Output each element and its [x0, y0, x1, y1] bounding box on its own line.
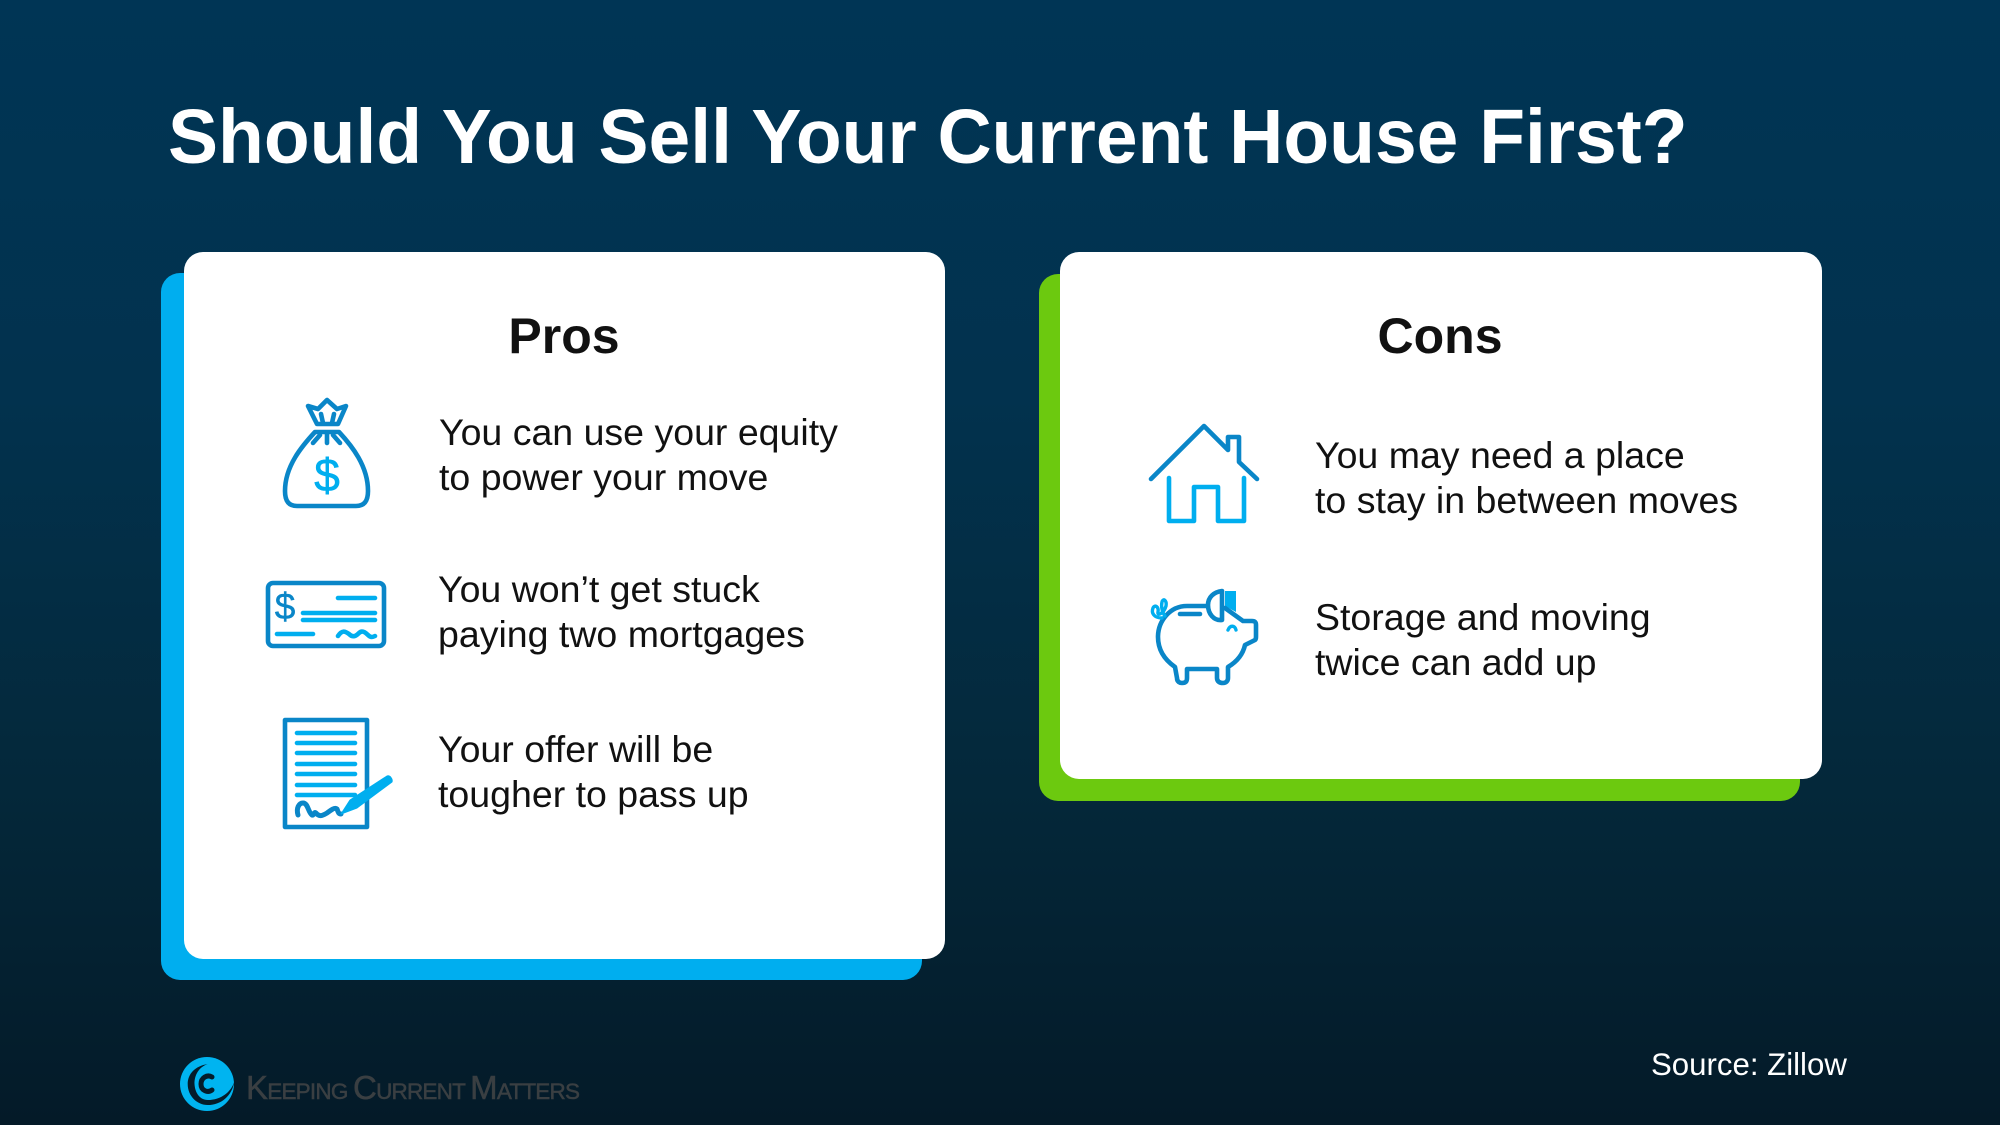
source note: Source: Zillow — [1651, 1047, 1847, 1082]
cons white card — [1060, 252, 1822, 779]
cons text: storage: Storage and moving — [1315, 596, 1651, 638]
cons text: storage: twice can add up — [1315, 641, 1596, 683]
icon: bank check — [266, 580, 386, 648]
cons green backing — [1039, 274, 1800, 801]
icon: signed contract — [282, 718, 393, 830]
cons text: place to stay: to stay in between moves — [1315, 479, 1738, 521]
cons heading: Cons — [1378, 308, 1502, 364]
pros text: equity — [439, 411, 838, 498]
logo swirl — [180, 1057, 234, 1111]
pros text: equity: to power your move — [439, 456, 768, 498]
icon: money bag: $ — [314, 449, 340, 501]
pros blue backing — [161, 273, 922, 980]
pros white card — [184, 252, 945, 959]
pros text: mortgages: paying two mortgages — [438, 613, 805, 655]
logo wordmark: KEEPING CURRENT MATTERS — [246, 1069, 580, 1105]
pros text: offer: Your offer will be — [438, 728, 713, 770]
cons text: place to stay — [1315, 434, 1738, 521]
panel: cons — [1039, 252, 1822, 801]
pros heading: Pros — [508, 308, 620, 364]
icon: piggy bank — [1150, 588, 1258, 686]
pros text: equity: You can use your equity — [439, 411, 838, 453]
logo: Keeping Current Matters — [180, 1057, 580, 1111]
panel: pros — [161, 252, 945, 980]
pros text: offer — [438, 728, 749, 815]
cons text: place to stay: You may need a place — [1315, 434, 1685, 476]
cons text: storage — [1315, 596, 1651, 683]
icon: bank check: $ — [275, 586, 295, 627]
pros text: mortgages: You won’t get stuck — [438, 568, 760, 610]
title: Should You Sell Your Current House First? — [168, 94, 1688, 180]
pros text: mortgages — [438, 568, 805, 655]
icon: money bag — [282, 398, 370, 508]
pros text: offer: tougher to pass up — [438, 773, 749, 815]
icon: house — [1148, 424, 1260, 524]
